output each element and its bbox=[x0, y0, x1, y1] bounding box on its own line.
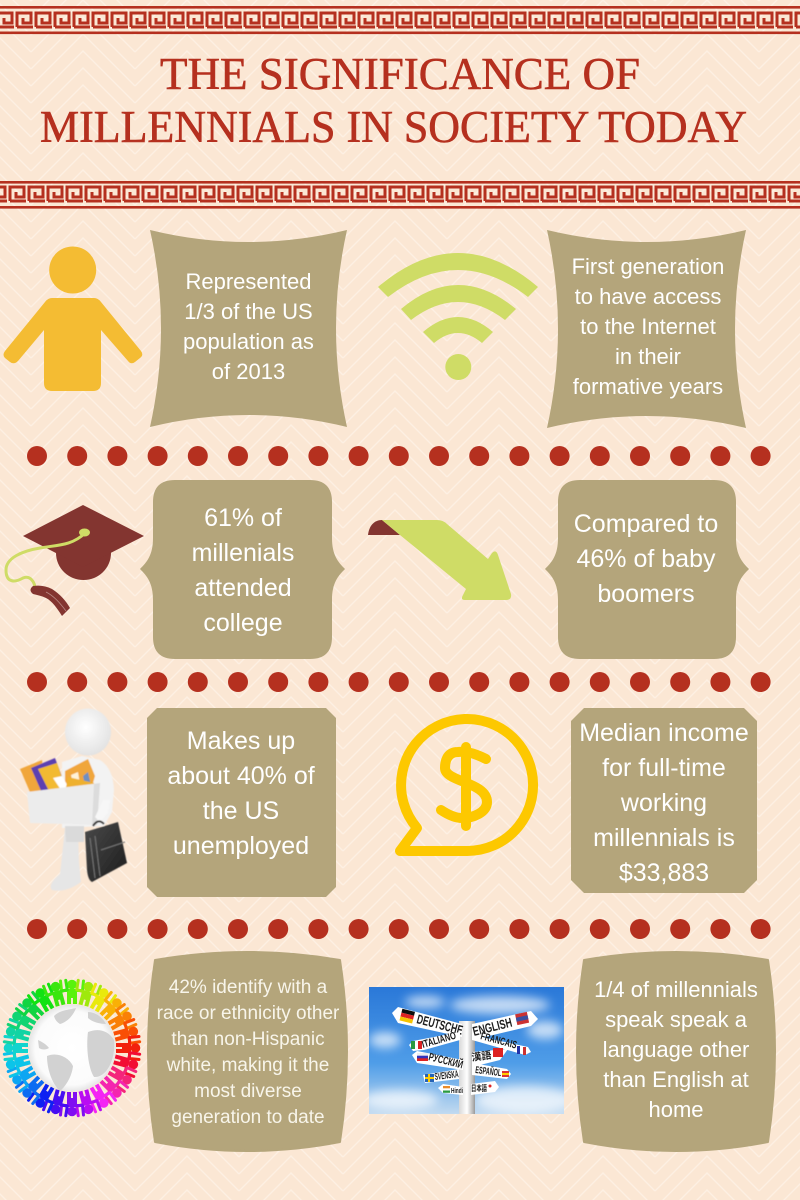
panel: 42% most diverse: most diverse bbox=[194, 1081, 302, 1102]
panel: 42% most diverse: white, making it the bbox=[166, 1055, 329, 1076]
panel: one third of US population: of 2013 bbox=[212, 359, 285, 384]
icon: man carrying box bbox=[20, 708, 127, 891]
panel: median income: Median income bbox=[579, 719, 749, 747]
panel: 42% most diverse: 42% identify with a bbox=[169, 977, 328, 998]
panel: 40% of US unemployed bbox=[147, 708, 336, 897]
photo: language signpost: РУССКИЙ bbox=[427, 1050, 464, 1071]
panel: one quarter speak another language: 1/4 of millennials bbox=[594, 977, 758, 1002]
panel: first generation with Internet: in their bbox=[615, 344, 681, 369]
arrow bbox=[368, 520, 511, 600]
divider dots row 3 bbox=[27, 919, 771, 939]
panel: 40% of US unemployed: the US bbox=[203, 797, 279, 825]
icon: person bbox=[4, 246, 142, 391]
panel: median income: millennials is bbox=[593, 824, 735, 852]
panel: first generation with Internet: to the Internet bbox=[580, 314, 716, 339]
panel: 46% of baby boomers: 46% of baby bbox=[576, 545, 716, 573]
photo: language signpost: ITALIANO bbox=[421, 1030, 457, 1051]
panel: 42% most diverse: generation to date bbox=[171, 1107, 325, 1128]
panel: 61% attended college: millenials bbox=[192, 539, 294, 567]
panel: median income: for full-time bbox=[602, 754, 726, 782]
panel: 61% attended college: 61% of bbox=[204, 504, 282, 532]
icon: wifi bbox=[378, 253, 538, 380]
panel: first generation with Internet: formative years bbox=[573, 374, 723, 399]
divider dots row 1 bbox=[27, 446, 771, 466]
photo: language signpost: FRANCAIS bbox=[479, 1030, 518, 1051]
panel: 61% attended college: college bbox=[203, 609, 283, 637]
panel: one third of US population: 1/3 of the US bbox=[184, 299, 313, 324]
panel: median income bbox=[571, 708, 757, 893]
panel: one quarter speak another language: speak speak a bbox=[605, 1007, 748, 1032]
panel: one quarter speak another language: language other bbox=[603, 1037, 749, 1062]
top meander border bbox=[0, 6, 800, 34]
bottom meander border bbox=[0, 181, 800, 209]
panel: one quarter speak another language bbox=[577, 952, 775, 1151]
panel: 61% attended college bbox=[140, 480, 345, 659]
panel: 42% most diverse: than non-Hispanic bbox=[171, 1029, 325, 1050]
photo: language signpost: 漢語 bbox=[471, 1048, 492, 1064]
photo: language signpost: Hindi bbox=[451, 1088, 463, 1095]
panel: 40% of US unemployed: about 40% of bbox=[167, 762, 315, 790]
photo: language signpost bbox=[362, 987, 575, 1114]
panel: 61% attended college: attended bbox=[194, 574, 292, 602]
panel: first generation with Internet: to have access bbox=[575, 284, 721, 309]
panel: 46% of baby boomers: Compared to bbox=[574, 510, 718, 538]
panel: one third of US population bbox=[150, 230, 347, 427]
panel: 40% of US unemployed: unemployed bbox=[173, 832, 309, 860]
panel: one third of US population: population as bbox=[183, 329, 314, 354]
panel: one quarter speak another language: than English at bbox=[603, 1067, 749, 1092]
icon: globe with ring of people bbox=[3, 979, 141, 1117]
icon: graduation cap bbox=[6, 505, 144, 616]
panel: one quarter speak another language: home bbox=[648, 1097, 704, 1122]
title: THE SIGNIFICANCE OF bbox=[160, 49, 640, 99]
panel: 46% of baby boomers bbox=[545, 480, 749, 659]
panel: 42% most diverse: race or ethnicity other bbox=[157, 1003, 340, 1024]
title bbox=[40, 49, 747, 152]
panel: first generation with Internet bbox=[547, 230, 746, 428]
photo: language signpost: SVENSKA bbox=[434, 1069, 459, 1083]
icon: dollar speech bubble bbox=[400, 719, 533, 851]
divider dots row 2 bbox=[27, 672, 771, 692]
panel: 42% most diverse bbox=[148, 952, 347, 1151]
panel: first generation with Internet: First generation bbox=[572, 254, 724, 279]
photo: language signpost: ENGLISH bbox=[471, 1015, 514, 1039]
panel: median income: $33,883 bbox=[619, 859, 709, 887]
photo: language signpost: DEUTSCHE bbox=[415, 1011, 465, 1038]
panel: one third of US population: Represented bbox=[186, 269, 311, 294]
photo: language signpost: ESPAÑOL bbox=[475, 1063, 502, 1079]
panel: median income: working bbox=[620, 789, 707, 817]
panel: 40% of US unemployed: Makes up bbox=[187, 727, 295, 755]
panel: 46% of baby boomers: boomers bbox=[597, 580, 695, 608]
photo: language signpost: 日本語 bbox=[471, 1083, 487, 1093]
title: MILLENNIALS IN SOCIETY TODAY bbox=[40, 102, 747, 152]
